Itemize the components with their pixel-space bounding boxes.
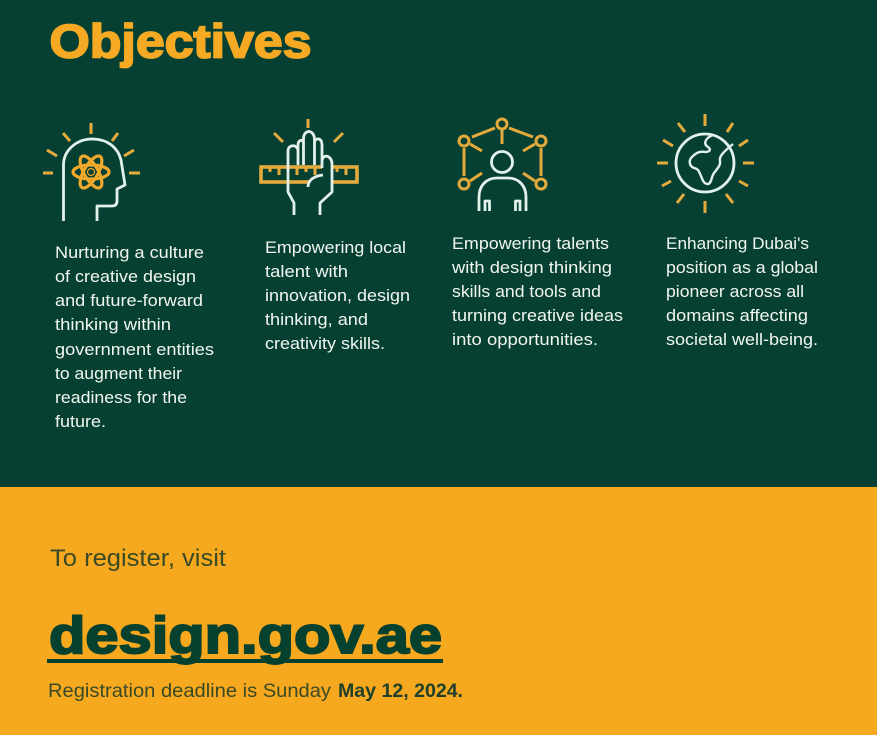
- text block: objective 3: Empowering talents: [452, 235, 609, 253]
- text block: objective 4: domains affecting: [666, 307, 808, 325]
- text block: objective 1: Nurturing a culture: [55, 244, 204, 262]
- text block: objective 3: into opportunities.: [452, 331, 598, 349]
- text block: objective 4: societal well-being.: [666, 331, 818, 349]
- text block: objective 3: [451, 235, 623, 349]
- panel: registration background: [0, 487, 877, 735]
- text block: objective 4: [666, 235, 818, 349]
- text block: objective 4: Enhancing Dubai's: [666, 235, 809, 253]
- text: registration deadline: Registration deadline is Sunday: [48, 681, 332, 702]
- text block: objective 1: and future-forward: [55, 292, 203, 310]
- text block: objective 2: innovation, design: [265, 287, 410, 305]
- icon: globe with rays: [657, 114, 754, 213]
- icon: hand with ruler: [261, 119, 357, 215]
- text block: objective 1: government entities: [55, 341, 214, 359]
- text block: objective 2: [265, 239, 410, 353]
- text block: objective 1: thinking within: [55, 316, 171, 334]
- text block: objective 1: future.: [55, 413, 106, 431]
- link: design.gov.ae with underline: design.gov.ae: [49, 607, 442, 665]
- text: register prompt: To register, visit: [50, 545, 226, 572]
- text block: objective 3: turning creative ideas: [452, 307, 623, 325]
- text block: objective 1: of creative design: [55, 268, 196, 286]
- text block: objective 2: talent with: [265, 263, 348, 281]
- text block: objective 3: with design thinking: [451, 259, 612, 277]
- text: registration deadline: May 12, 2024.: [338, 681, 463, 702]
- title: Objectives: [50, 14, 312, 68]
- panel: objectives background: [0, 0, 877, 487]
- text block: objective 3: skills and tools and: [452, 283, 601, 301]
- text block: objective 1: to augment their: [55, 365, 183, 383]
- text block: objective 1: [55, 244, 214, 431]
- text block: objective 1: readiness for the: [55, 389, 187, 407]
- text block: objective 4: position as a global: [666, 259, 818, 277]
- text block: objective 2: Empowering local: [265, 239, 406, 257]
- text block: objective 2: thinking, and: [265, 311, 368, 329]
- text block: objective 2: creativity skills.: [265, 335, 385, 353]
- text: registration deadline: [48, 681, 463, 702]
- icon: head with atom: [43, 123, 140, 221]
- icon: person in network: [459, 119, 546, 211]
- text block: objective 4: pioneer across all: [666, 283, 804, 301]
